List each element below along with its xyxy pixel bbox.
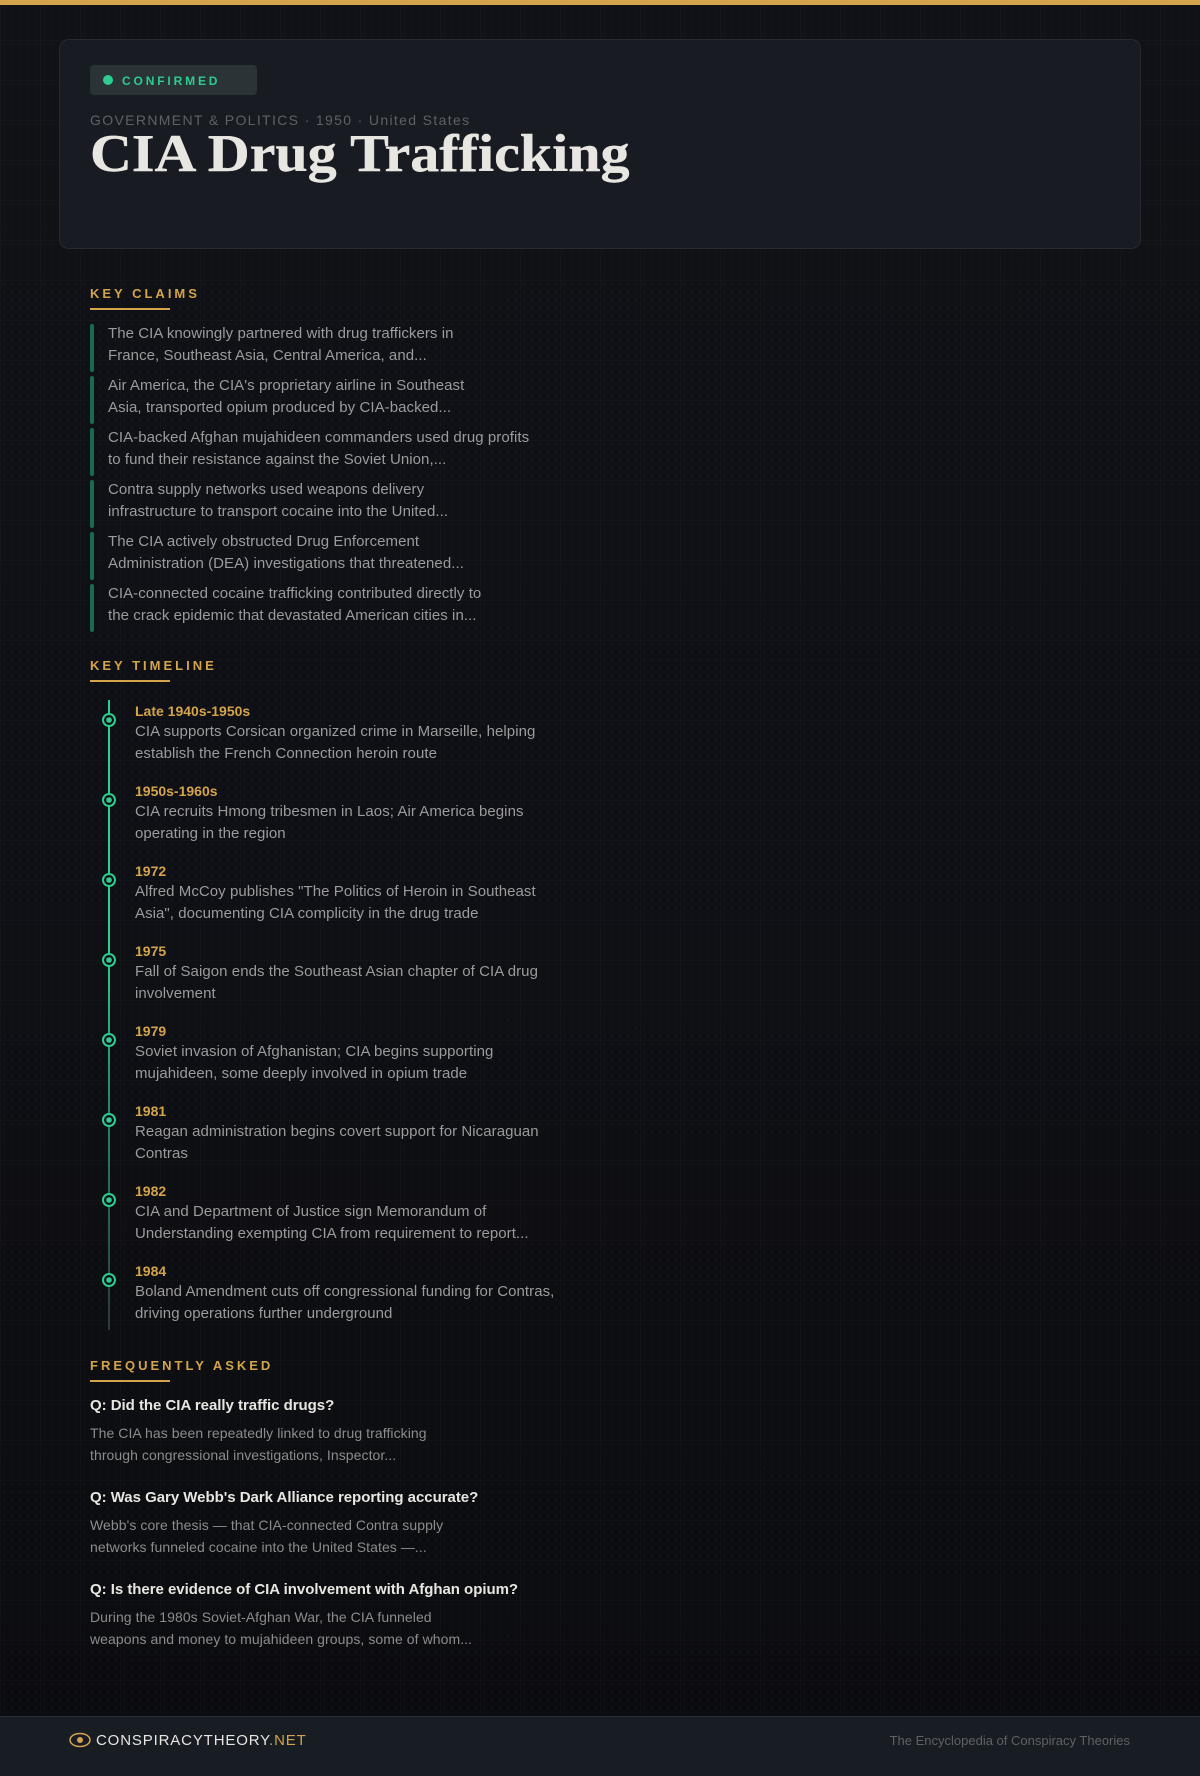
claim 4 (90, 480, 448, 528)
timeline event: 1979 (102, 1023, 493, 1082)
claim 1: France, Southeast Asia, Central America, and... (108, 347, 427, 364)
timeline event: Late 1940s-1950s: establish the French Connection heroin route (135, 745, 437, 762)
claim 5: The CIA actively obstructed Drug Enforcement (108, 533, 419, 550)
timeline event: 1982: 1982 (135, 1183, 166, 1199)
heading: key timeline: KEY TIMELINE (90, 658, 217, 673)
timeline event: 1972: Alfred McCoy publishes "The Politics of Heroin in Southeast (135, 883, 536, 900)
timeline event: 1981: Reagan administration begins covert support for Nicaraguan (135, 1123, 539, 1140)
timeline event: 1981: Contras (135, 1145, 188, 1162)
faq 2 (90, 1489, 478, 1555)
claim 4: infrastructure to transport cocaine into the United... (108, 503, 448, 520)
timeline event: 1972: 1972 (135, 863, 166, 879)
timeline line (108, 700, 110, 1330)
panel: footer (0, 1716, 1200, 1776)
claim 6 (90, 584, 481, 632)
claim 6: CIA-connected cocaine trafficking contributed directly to (108, 585, 481, 602)
timeline event: 1984: driving operations further underground (135, 1305, 392, 1322)
timeline event: Late 1940s-1950s: Late 1940s-1950s (135, 703, 250, 719)
icon: eye logo (69, 1732, 91, 1748)
claim 4: Contra supply networks used weapons delivery (108, 481, 424, 498)
timeline event: Late 1940s-1950s (102, 703, 535, 762)
heading: key claims: KEY CLAIMS (90, 286, 200, 301)
logo wordmark: CONSPIRACYTHEORY.NET (96, 1732, 307, 1749)
claim 5 (90, 532, 464, 580)
timeline event: 1975: Fall of Saigon ends the Southeast Asian chapter of CIA drug (135, 963, 538, 980)
timeline event: 1984: Boland Amendment cuts off congressional funding for Contras, (135, 1283, 554, 1300)
faq 1: Q: Did the CIA really traffic drugs? (90, 1397, 334, 1414)
timeline event: 1979: 1979 (135, 1023, 166, 1039)
faq 1: through congressional investigations, Inspector... (90, 1447, 396, 1463)
claim 3: CIA-backed Afghan mujahideen commanders used drug profits (108, 429, 529, 446)
timeline event: 1972: Asia", documenting CIA complicity in the drug trade (135, 905, 479, 922)
timeline event: 1981: 1981 (135, 1103, 166, 1119)
title: CIA Drug Trafficking (90, 125, 630, 183)
faq 3 (90, 1581, 518, 1647)
claim 3 (90, 428, 529, 476)
timeline event: 1972 (102, 863, 536, 922)
timeline event: 1975: 1975 (135, 943, 166, 959)
timeline event: 1984: 1984 (135, 1263, 166, 1279)
top accent bar (0, 0, 1200, 5)
claim 5: Administration (DEA) investigations that threatened... (108, 555, 464, 572)
timeline event: 1981 (102, 1103, 539, 1162)
category line: GOVERNMENT & POLITICS · 1950 · United States (90, 112, 470, 128)
faq 3: weapons and money to mujahideen groups, some of whom... (90, 1631, 472, 1647)
faq 2: Q: Was Gary Webb's Dark Alliance reporting accurate? (90, 1489, 478, 1506)
timeline event: 1979: mujahideen, some deeply involved in opium trade (135, 1065, 467, 1082)
claim 2 (90, 376, 464, 424)
claim 1: The CIA knowingly partnered with drug traffickers in (108, 325, 454, 342)
claim 1 (90, 324, 454, 372)
claim 6: the crack epidemic that devastated American cities in... (108, 607, 477, 624)
timeline event: 1975 (102, 943, 538, 1002)
timeline event: 1950s-1960s (102, 783, 524, 842)
faq 3: Q: Is there evidence of CIA involvement with Afghan opium? (90, 1581, 518, 1598)
status badge (90, 65, 257, 95)
faq 3: During the 1980s Soviet-Afghan War, the CIA funneled (90, 1609, 432, 1625)
timeline event: 1950s-1960s: operating in the region (135, 825, 286, 842)
faq 1 (90, 1397, 427, 1463)
footer tagline: The Encyclopedia of Conspiracy Theories (890, 1733, 1130, 1748)
timeline event: 1982: Understanding exempting CIA from requirement to report... (135, 1225, 529, 1242)
timeline event: 1982: CIA and Department of Justice sign Memorandum of (135, 1203, 486, 1220)
claim 2: Air America, the CIA's proprietary airline in Southeast (108, 377, 464, 394)
claim 3: to fund their resistance against the Soviet Union,... (108, 451, 446, 468)
faq 2: networks funneled cocaine into the United States —... (90, 1539, 427, 1555)
claim 2: Asia, transported opium produced by CIA-backed... (108, 399, 451, 416)
badge dot (103, 75, 113, 85)
timeline event: Late 1940s-1950s: CIA supports Corsican organized crime in Marseille, helping (135, 723, 535, 740)
panel: header card (59, 39, 1141, 249)
timeline event: 1982 (102, 1183, 529, 1242)
timeline event: 1950s-1960s: CIA recruits Hmong tribesmen in Laos; Air America begins (135, 803, 524, 820)
timeline event: 1950s-1960s: 1950s-1960s (135, 783, 218, 799)
timeline event: 1975: involvement (135, 985, 216, 1002)
timeline event: 1979: Soviet invasion of Afghanistan; CIA begins supporting (135, 1043, 493, 1060)
badge label: CONFIRMED (122, 74, 220, 88)
timeline event: 1984 (102, 1263, 554, 1322)
heading: frequently asked: FREQUENTLY ASKED (90, 1358, 273, 1373)
faq 2: Webb's core thesis — that CIA-connected Contra supply (90, 1517, 443, 1533)
faq 1: The CIA has been repeatedly linked to drug trafficking (90, 1425, 427, 1441)
